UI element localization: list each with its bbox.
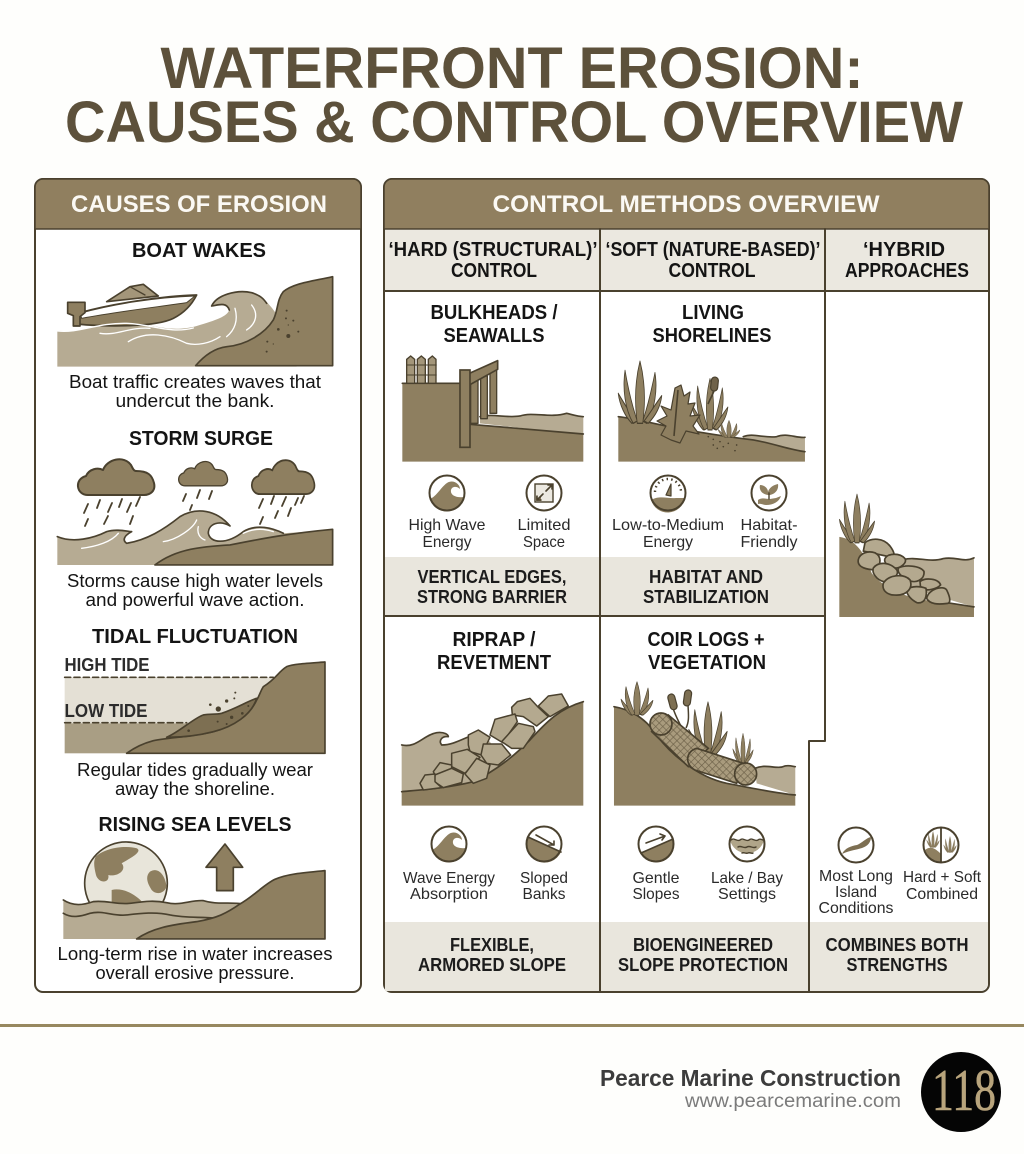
card: riprap / revetment: FLEXIBLE, [450,935,534,955]
card: riprap / revetment: ARMORED SLOPE [418,955,566,975]
illustration: coir logs and vegetation on a slope [614,682,795,806]
column heading: hybrid approaches: ‘HYBRID [863,239,945,261]
card: hybrid approaches: STRENGTHS [846,955,948,975]
card: bulkheads / seawalls: STRONG BARRIER [417,587,567,607]
card: bulkheads / seawalls: Limited [518,517,570,534]
panel heading: control methods overview [384,179,989,229]
column heading: hard control: ‘HARD (STRUCTURAL)’ [388,239,598,261]
card: bulkheads / seawalls: High Wave [408,517,486,534]
card: bulkheads / seawalls [402,302,583,607]
card: riprap / revetment: Banks [522,886,566,903]
illustration: high and low tide lines [65,662,325,753]
illustration: hybrid stones with grass [839,494,974,617]
title [65,36,963,155]
cause: boat wakes: Boat traffic creates waves that [69,372,321,392]
label: low tide: LOW TIDE [64,701,148,721]
logo badge: 118 [932,1057,996,1123]
card: living shorelines: HABITAT AND [649,567,763,587]
illustration: bulkhead wall [402,356,583,462]
icon: wave energy absorption [432,826,466,862]
card: coir logs + vegetation: Gentle [632,870,680,887]
footer [0,1024,1024,1132]
icon: most Long Island conditions [838,828,874,862]
cause: boat wakes: BOAT WAKES [132,240,266,262]
card: living shorelines: Habitat- [740,517,798,534]
cause: rising sea levels [58,814,332,983]
card: coir logs + vegetation: SLOPE PROTECTION [618,955,788,975]
cause: rising sea levels: overall erosive pressure. [96,963,294,983]
illustration: riprap stones on a slope [402,694,583,806]
icon: hard plus soft combined [924,828,958,862]
panel heading: causes of erosion: CAUSES OF EROSION [71,191,327,218]
icon: high wave energy [430,476,464,511]
card: coir logs + vegetation: Slopes [632,886,680,903]
card: hybrid approaches: COMBINES BOTH [826,935,968,955]
card: living shorelines: LIVING [682,302,744,324]
card: coir logs + vegetation: Settings [718,886,776,903]
card: riprap / revetment: RIPRAP / [452,629,536,651]
card: riprap / revetment: Wave Energy [403,870,495,887]
title: CAUSES & CONTROL OVERVIEW [65,90,963,155]
column heading: hybrid approaches [845,239,969,282]
card: riprap / revetment: REVETMENT [437,652,551,674]
card: hybrid approaches: Hard + Soft [903,869,982,886]
card: living shorelines: STABILIZATION [643,587,769,607]
illustration: storm clouds and surge [57,459,333,565]
summary bands [385,557,988,991]
panel heading: causes of erosion [35,179,361,229]
cause: tidal fluctuation: Regular tides gradually wear [77,760,313,780]
card: riprap / revetment: Absorption [410,886,488,903]
column heading: soft control [606,239,820,282]
label: high tide: HIGH TIDE [64,655,150,675]
cause: tidal fluctuation [64,626,325,799]
panel heading: control methods overview: CONTROL METHODS OVERVIEW [492,191,880,218]
card: bulkheads / seawalls: VERTICAL EDGES, [418,567,566,587]
card: hybrid approaches: Conditions [818,900,894,917]
card: hybrid approaches: Most Long [819,868,893,885]
column heading: hard control: CONTROL [451,260,537,282]
cause: rising sea levels: RISING SEA LEVELS [98,814,292,836]
card: coir logs + vegetation [614,629,795,975]
cause: tidal fluctuation: away the shoreline. [115,779,275,799]
card: bulkheads / seawalls: BULKHEADS / [430,302,558,324]
illustration: marsh plants on a shoreline [618,361,805,462]
column heading band [385,230,988,291]
card: riprap / revetment [402,629,583,975]
company name: Pearce Marine Construction [600,1065,901,1091]
logo badge [921,1052,1001,1132]
panel: causes of erosion [35,179,361,992]
icon: limited space [526,476,562,510]
cause: storm surge: Storms cause high water levels [67,571,323,591]
card: bulkheads / seawalls: Energy [422,534,472,551]
illustration: boat making a wake [57,277,333,367]
card: living shorelines: Energy [643,534,693,551]
card: living shorelines [612,302,805,607]
card: coir logs + vegetation: COIR LOGS + [648,629,764,651]
card: living shorelines: SHORELINES [652,325,772,347]
column heading: soft control: CONTROL [668,260,756,282]
website: www.pearcemarine.com [684,1091,901,1112]
card: hybrid approaches [818,494,982,975]
card: riprap / revetment: Sloped [520,870,568,887]
column heading: soft control: ‘SOFT (NATURE-BASED)’ [606,239,820,261]
cause: boat wakes: undercut the bank. [116,391,274,411]
illustration: globe, up arrow and rising water [63,842,325,939]
card: bulkheads / seawalls: SEAWALLS [444,325,544,347]
card: hybrid approaches: Combined [906,886,978,903]
cause: storm surge: and powerful wave action. [86,590,304,610]
card: bulkheads / seawalls: Space [523,534,565,551]
icon: sloped banks [526,826,562,863]
card: coir logs + vegetation: Lake / Bay [711,870,783,887]
icon: habitat-friendly plant [752,476,786,510]
icon: lake or bay [730,826,764,862]
title: WATERFRONT EROSION: [160,36,864,101]
cause: rising sea levels: Long-term rise in water increases [58,944,332,964]
cause: boat wakes [57,240,333,411]
card: hybrid approaches: Island [835,884,877,901]
cause: tidal fluctuation: TIDAL FLUCTUATION [92,626,298,648]
cause: storm surge [57,428,333,610]
icon: low-to-medium energy gauge [650,476,686,512]
card: living shorelines: Low-to-Medium [612,517,724,534]
card: coir logs + vegetation: BIOENGINEERED [633,935,773,955]
cause: storm surge: STORM SURGE [129,428,273,450]
card: living shorelines: Friendly [740,534,798,551]
column heading: hard control [388,239,598,282]
column heading: hybrid approaches: APPROACHES [845,260,969,282]
card: coir logs + vegetation: VEGETATION [648,652,766,674]
panel: control methods overview [384,179,989,992]
icon: gentle slopes [638,826,674,862]
